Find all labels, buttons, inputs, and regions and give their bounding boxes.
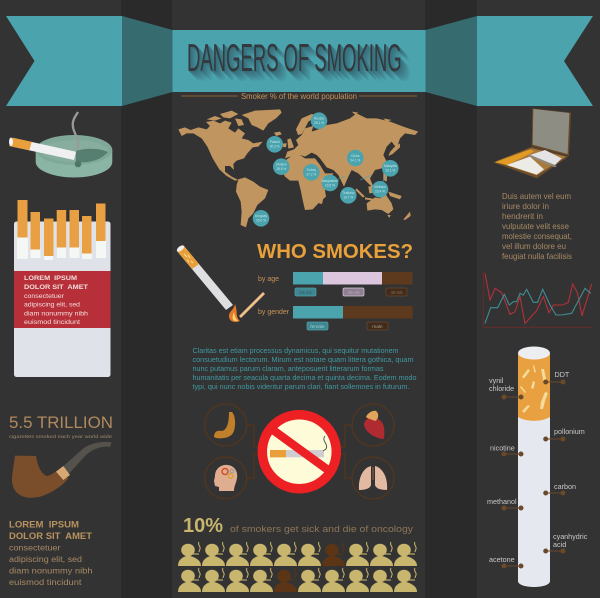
right column text block: vel illum dolore eu (502, 242, 566, 251)
world map (178, 109, 418, 227)
country smoking bubbles: 27.2 % (306, 173, 316, 177)
country smoking bubbles: 25.0 % (256, 219, 266, 223)
chemical labels: chloride (489, 384, 514, 393)
pack label text: LOREM IPSUM (24, 275, 77, 282)
gender tags: female (310, 324, 325, 330)
pack label text: diam nonummy nibh (24, 310, 88, 318)
bar chart: by gender (258, 306, 412, 330)
left column text block: euismod tincidunt (9, 577, 82, 587)
cigarette body (518, 346, 550, 587)
age tags: 25-45 (347, 290, 360, 296)
gender tags (307, 322, 388, 330)
chemical labels (487, 370, 588, 564)
bar chart: by gender: by gender (258, 309, 290, 316)
pack label text (24, 275, 89, 326)
icon: heart (364, 411, 384, 439)
teal paragraph (192, 346, 416, 391)
illustration: cigarette and lit match (176, 244, 265, 322)
chemical labels: carbon (554, 482, 576, 491)
title: DANGERS OF SMOKING (187, 37, 402, 80)
country smoking bubbles: Turkey (306, 168, 317, 172)
map heading: Smoker % of the world population (241, 92, 357, 101)
teal paragraph: typi, qui nunc nobis videntur parum clari, fiant sollemnes in futurum. (192, 382, 410, 391)
icon: lungs (359, 466, 387, 490)
left column text block: consectetuer (9, 543, 61, 553)
left column text block: DOLOR SIT AMET (9, 531, 93, 541)
country smoking bubbles: Ukraine (276, 162, 287, 166)
cigarette pack (14, 200, 110, 377)
country smoking bubbles: 28.1 % (314, 121, 324, 125)
left column text block: LOREM IPSUM (9, 520, 79, 530)
right column text block: Duis autem vel eum (502, 192, 571, 201)
right column text block: vulputate velit esse (502, 222, 569, 231)
left column text block: adipiscing elit, sed (9, 554, 82, 564)
country smoking bubbles: 19.7 % (343, 196, 353, 200)
cigarettes in pack (17, 237, 106, 260)
country smoking bubbles: Vietnam (374, 185, 386, 189)
chemical labels: methanol (487, 497, 517, 506)
icon: stomach (214, 412, 235, 438)
large cigarette with chemicals (487, 346, 588, 587)
health effects diagram (205, 404, 394, 499)
teal paragraph: nunc putamus parum claram, anteposuerit litterarum formas (192, 364, 384, 373)
people pictogram (178, 542, 417, 592)
pack label text: adipiscing elit, sed (24, 302, 80, 308)
country smoking bubbles: 23.4 % (375, 190, 385, 194)
country smoking bubbles: Poland (270, 140, 280, 144)
chemical labels: acetone (489, 555, 515, 564)
country smoking bubbles: Thailand (342, 191, 355, 195)
country smoking bubbles: Uruguay (255, 214, 267, 218)
chemical labels: vynil (489, 376, 504, 385)
line chart (483, 272, 592, 327)
country smoking bubbles: 26.1 % (385, 169, 395, 173)
country smoking bubbles: 30.3 % (270, 145, 280, 149)
gender tags: male (372, 324, 383, 330)
age tags: 45-65 (390, 290, 403, 296)
bar chart: by age (258, 272, 412, 296)
bar chart: by age: by age (258, 276, 279, 283)
age tags: 16-24 (299, 290, 312, 296)
country smoking bubbles: 24.1 % (350, 158, 360, 162)
left column text block: diam nonummy nibh (9, 566, 93, 576)
chemical labels: acid (553, 540, 566, 549)
right column text block: feugiat nulla facilisis (502, 252, 572, 261)
statistic: 5.5 trillion: 5.5 TRILLION (9, 414, 113, 432)
pack label text: euismod tincidunt (24, 319, 80, 326)
country smoking bubbles: Malaysia (384, 164, 397, 168)
icon: open cigarette case (493, 108, 571, 178)
chemical labels: nicotine (490, 444, 515, 453)
oncology statistic: 10% (183, 515, 223, 537)
country smoking bubbles: Russia (314, 116, 324, 120)
ribbon banner (6, 16, 593, 106)
age tags (295, 288, 407, 296)
statistic: 5.5 trillion: cigarettes smoked each year world wide (9, 434, 113, 439)
country smoking bubbles: Bangladesh (322, 179, 339, 183)
oncology statistic (183, 515, 413, 537)
icon: ashtray with cigarette (9, 112, 112, 178)
who smokes heading: WHO SMOKES? (257, 241, 413, 263)
right column text block: molestie consequat, (502, 232, 572, 241)
teal paragraph: consuetudium lectorum. Mirum est notare quam littera gothica, quam (192, 355, 414, 364)
teal paragraph: Claritas est etiam processus dynamicus, qui sequitur mutationem (192, 346, 398, 355)
right column text block (502, 192, 572, 261)
pack label text: consectetuer (24, 293, 65, 300)
oncology statistic: of smokers get sick and die of oncology (230, 524, 413, 534)
country smoking bubbles (253, 112, 399, 227)
no smoking sign (262, 415, 336, 489)
chemical labels: cyanhydric (553, 532, 588, 541)
country smoking bubbles: 28.8 % (276, 167, 286, 171)
left column text block (9, 520, 93, 587)
icon: tobacco pipe (12, 442, 112, 498)
chemical markers (502, 380, 565, 568)
teal paragraph: humanitatis per seacula quarta decima et quinta decima. Eodem modo (192, 373, 416, 382)
pack label text: DOLOR SIT AMET (24, 284, 89, 291)
right column text block: hendrerit in (502, 212, 543, 221)
chemical labels: DDT (554, 370, 570, 379)
icon: brain head (214, 465, 237, 491)
country smoking bubbles: 23.5 % (325, 183, 335, 187)
country smoking bubbles: China (351, 154, 360, 158)
right column text block: iriure dolor in (502, 202, 549, 211)
chemical labels: pollonium (554, 427, 585, 436)
